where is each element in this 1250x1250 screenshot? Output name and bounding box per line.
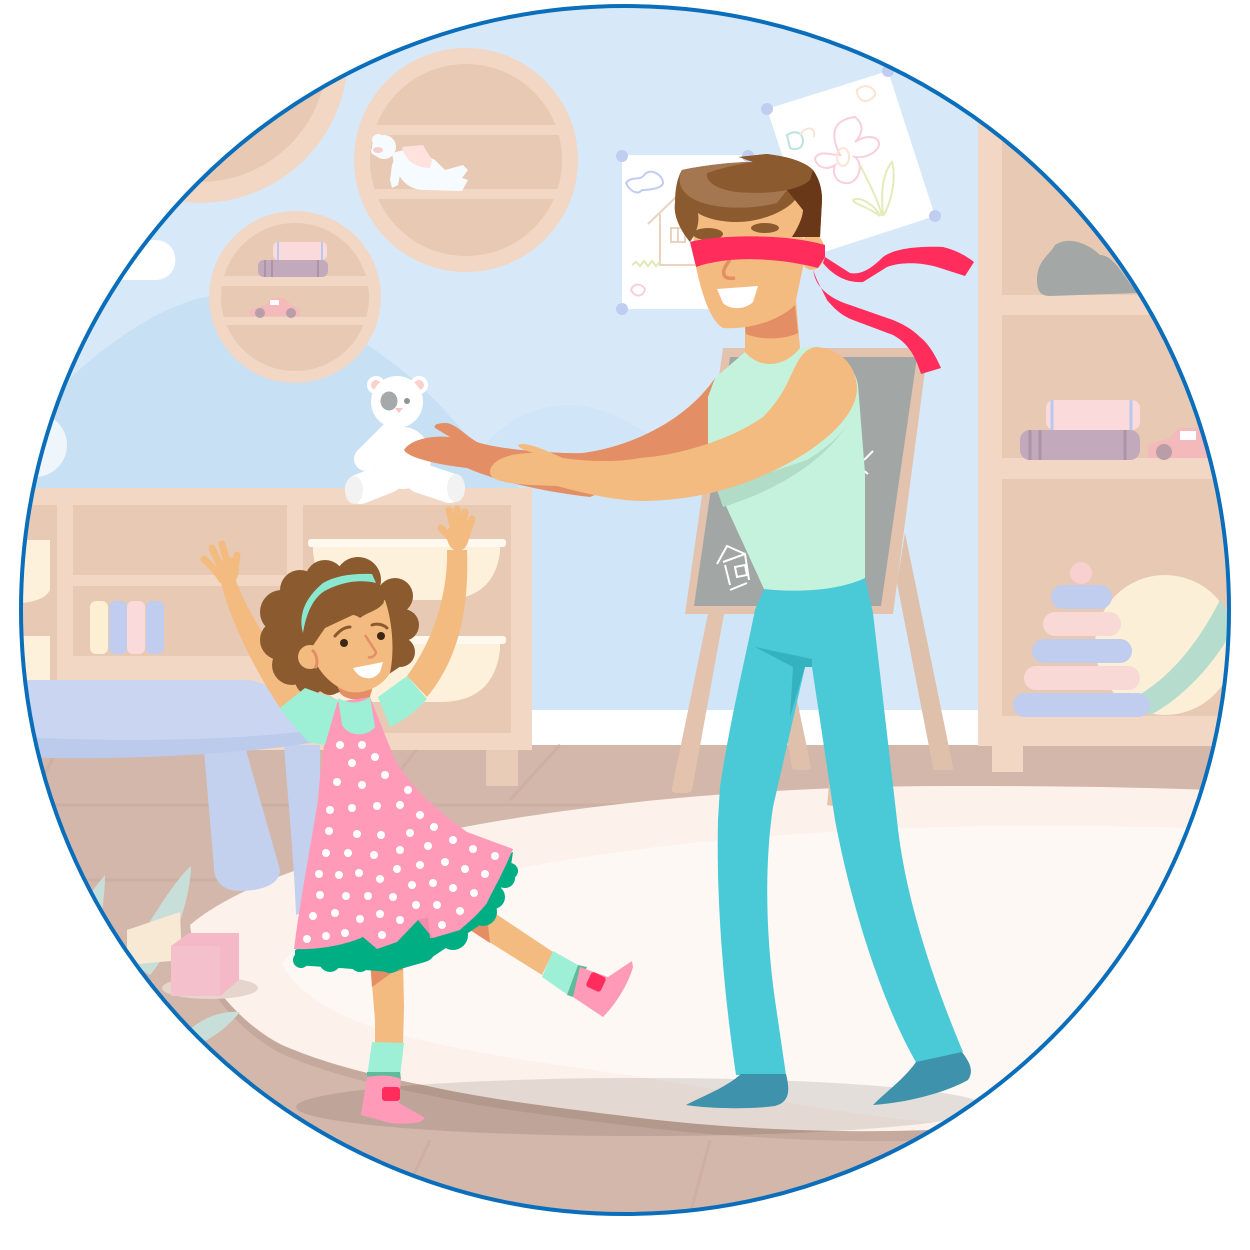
floor	[41, 745, 1212, 1212]
man: trousers	[718, 578, 963, 1075]
plant and toy block	[85, 866, 258, 1050]
girl: arms	[204, 509, 472, 708]
rug edge shadow	[218, 998, 928, 1141]
wall hills	[36, 240, 520, 488]
girl: face	[298, 574, 392, 699]
rug	[190, 786, 1250, 1131]
girl: right leg and sock	[470, 912, 633, 1017]
man: tank top	[708, 347, 865, 591]
right bookcase	[978, 122, 1227, 772]
teddy bear	[345, 376, 465, 504]
man: near arm	[490, 347, 857, 501]
floor shadow under characters	[296, 1078, 986, 1136]
round shelf top left	[182, 76, 346, 203]
bookcase books and toy car	[1020, 400, 1225, 460]
pinned drawing: house	[616, 150, 754, 315]
girl: sleeves and collar	[280, 676, 427, 745]
round shelf with books and car	[209, 211, 381, 383]
girl: hair	[260, 557, 419, 695]
round shelf with toy bear	[354, 48, 578, 272]
man: shoes	[686, 1052, 971, 1108]
man: blindfold	[690, 236, 974, 374]
wall	[69, 8, 978, 710]
man: neck and head	[675, 154, 825, 364]
baseboard	[532, 710, 978, 720]
man: far arm	[404, 378, 715, 497]
pinned drawing: flower	[761, 65, 941, 255]
girl: dress	[293, 697, 518, 973]
girl: left leg and sock	[361, 960, 425, 1124]
low cabinet	[0, 488, 532, 786]
stacking ring toy and ball	[1013, 562, 1235, 717]
kids table	[0, 680, 320, 915]
easel	[672, 348, 953, 807]
